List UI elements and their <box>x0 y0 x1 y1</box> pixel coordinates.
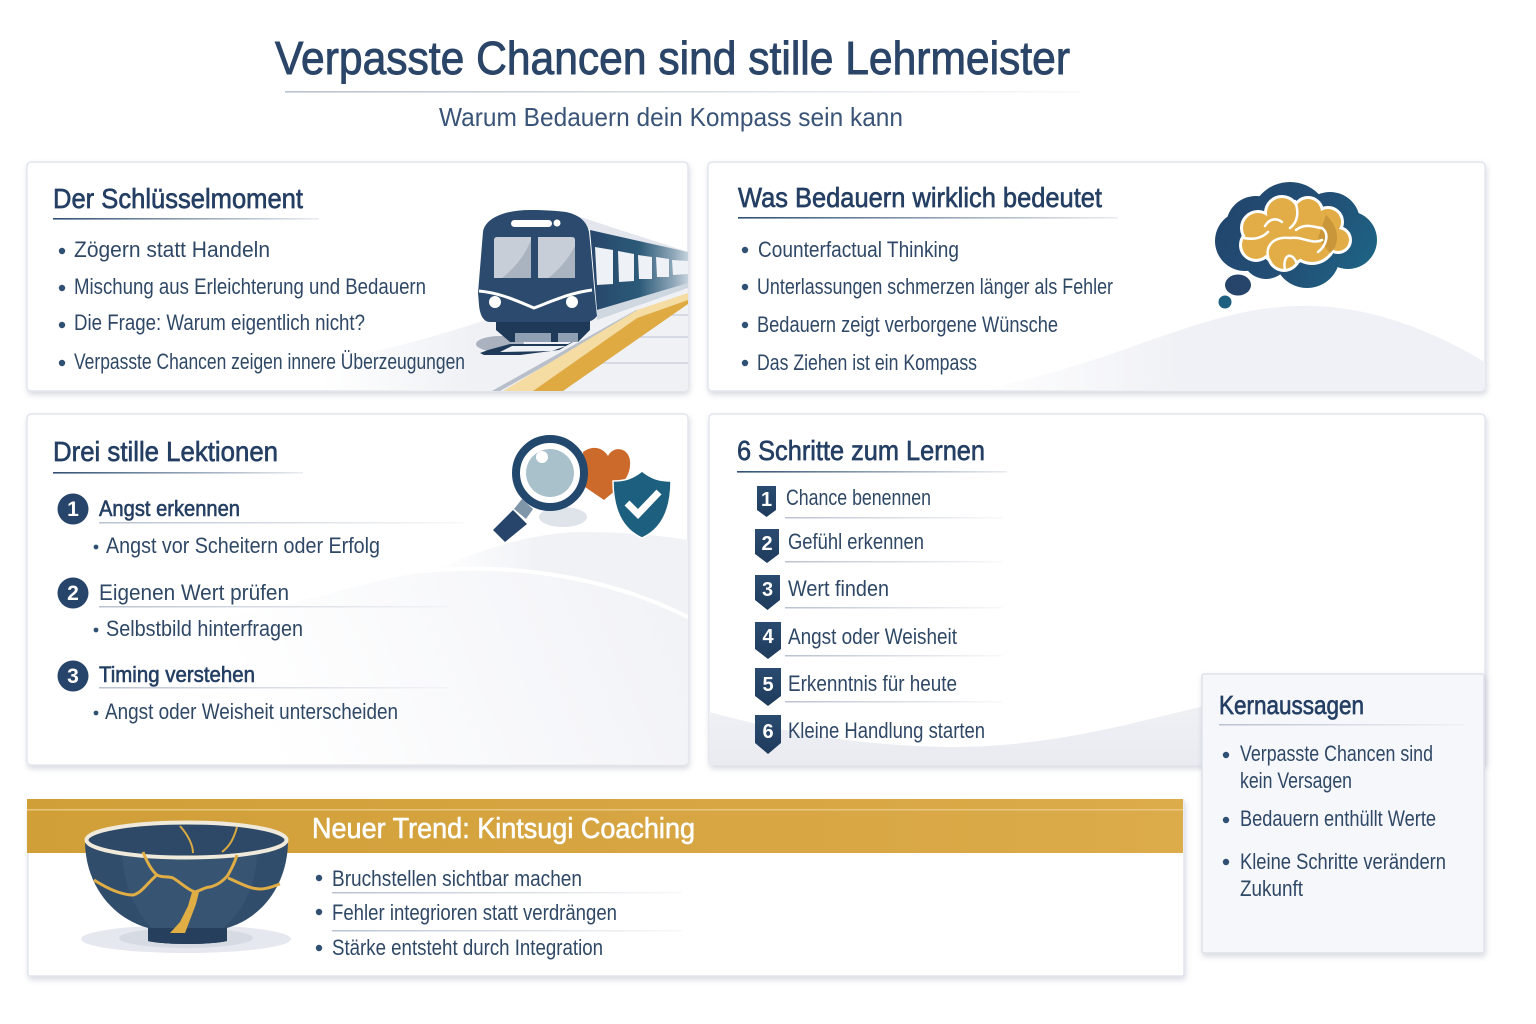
lesson 3: 3 <box>67 665 79 688</box>
bullet list: Kernaussagen: Verpasste Chancen sind <box>1240 741 1433 766</box>
bullet list: Bedauern <box>742 237 1113 375</box>
heading rule <box>1219 724 1465 726</box>
panel: Neuer Trend Kintsugi Coaching <box>27 799 1184 976</box>
bullet list: Schlüsselmoment <box>59 237 465 374</box>
heading: Drei stille Lektionen: Drei stille Lektionen <box>53 436 278 467</box>
lesson 1: Angst erkennen <box>99 496 240 521</box>
step 3: Wert finden <box>788 576 889 601</box>
heading: Was Bedauern wirklich bedeutet: Was Bedauern wirklich bedeutet <box>738 182 1102 213</box>
step 4: Angst oder Weisheit <box>788 624 957 649</box>
heading rule <box>53 218 319 220</box>
step 1: 1 <box>761 489 772 511</box>
bullet list: Kernaussagen: Bedauern enthüllt Werte <box>1240 806 1436 831</box>
step 6: 6 <box>762 721 774 743</box>
bullet list: Kernaussagen: Kleine Schritte verändern <box>1240 849 1446 874</box>
bullet list: Schlüsselmoment: Zögern statt Handeln <box>74 237 270 262</box>
bullet list: Kintsugi: Stärke entsteht durch Integration <box>332 935 603 960</box>
subtitle: Warum Bedauern dein Kompass sein kann <box>439 102 903 132</box>
step 3 <box>755 575 1002 610</box>
gold header band <box>27 799 1183 853</box>
title: Verpasste Chancen sind stille Lehrmeister <box>275 32 1070 84</box>
step 4: 4 <box>762 626 774 648</box>
step 3: 3 <box>762 579 773 601</box>
bullet list: Kernaussagen: kein Versagen <box>1240 768 1352 793</box>
bullet list: Kernaussagen <box>1223 741 1446 901</box>
heading rule <box>738 217 1118 219</box>
bullet list: Bedauern: Unterlassungen schmerzen länger als Fehler <box>757 274 1113 299</box>
lesson 3 <box>58 660 449 724</box>
panel: Was Bedauern wirklich bedeutet <box>708 162 1485 391</box>
lesson 1: Angst vor Scheitern oder Erfolg <box>106 533 380 558</box>
lesson 1 <box>58 494 464 558</box>
bullet list: Kintsugi: Bruchstellen sichtbar machen <box>332 866 582 891</box>
panel: Der Schlüsselmoment <box>27 162 688 391</box>
panel: Drei stille Lektionen <box>27 414 688 765</box>
lesson 3: Timing verstehen <box>99 662 255 687</box>
step 5: Erkenntnis für heute <box>788 671 957 696</box>
icon: kintsugi bowl <box>81 822 291 953</box>
panel: 6 Schritte zum Lernen <box>709 414 1485 765</box>
bullet list: Bedauern: Das Ziehen ist ein Kompass <box>757 350 977 375</box>
bullet list: Kintsugi: Fehler integrioren statt verdrängen <box>332 900 617 925</box>
heading: Kernaussagen: Kernaussagen <box>1219 690 1364 720</box>
heading: Der Schlüsselmoment: Der Schlüsselmoment <box>53 183 303 214</box>
step 6: Kleine Handlung starten <box>788 718 985 743</box>
lesson 2: 2 <box>67 582 79 605</box>
title underline <box>285 91 1080 93</box>
heading rule <box>737 471 1007 473</box>
step 2: 2 <box>761 533 773 555</box>
lesson 1: 1 <box>67 498 79 521</box>
bullet list: Schlüsselmoment: Mischung aus Erleichterung und Bedauern <box>74 274 426 299</box>
step 1 <box>757 485 1002 518</box>
step 2: Gefühl erkennen <box>788 529 924 554</box>
icon: magnifier, heart and shield <box>493 439 671 542</box>
bullet list: Kernaussagen: Zukunft <box>1240 876 1303 901</box>
step 4 <box>755 622 1002 659</box>
step 5: 5 <box>762 674 774 696</box>
icon: train on platform <box>476 210 688 391</box>
bullet list: Bedauern: Counterfactual Thinking <box>758 237 959 262</box>
step 2 <box>755 529 1002 563</box>
icon: brain in thought cloud <box>1215 182 1377 308</box>
lesson 2 <box>58 578 449 641</box>
heading: Neuer Trend: Neuer Trend: Kintsugi Coaching <box>312 813 695 845</box>
lesson 2: Eigenen Wert prüfen <box>99 580 289 605</box>
bullet list: Schlüsselmoment: Verpasste Chancen zeigen innere Überzeugungen <box>74 349 465 374</box>
heading rule <box>53 472 303 474</box>
lesson 3: Angst oder Weisheit unterscheiden <box>105 699 398 724</box>
step 1: Chance benennen <box>786 485 931 510</box>
heading: 6 Schritte zum Lernen: 6 Schritte zum Lernen <box>737 435 985 466</box>
bullet list: Bedauern: Bedauern zeigt verborgene Wünsche <box>757 312 1058 337</box>
step 6 <box>755 715 985 754</box>
lesson 2: Selbstbild hinterfragen <box>106 616 303 641</box>
bullet list: Kintsugi <box>316 866 682 960</box>
panel: Kernaussagen <box>1202 674 1484 953</box>
step 5 <box>755 668 1002 706</box>
bullet list: Schlüsselmoment: Die Frage: Warum eigentlich nicht? <box>74 310 365 335</box>
